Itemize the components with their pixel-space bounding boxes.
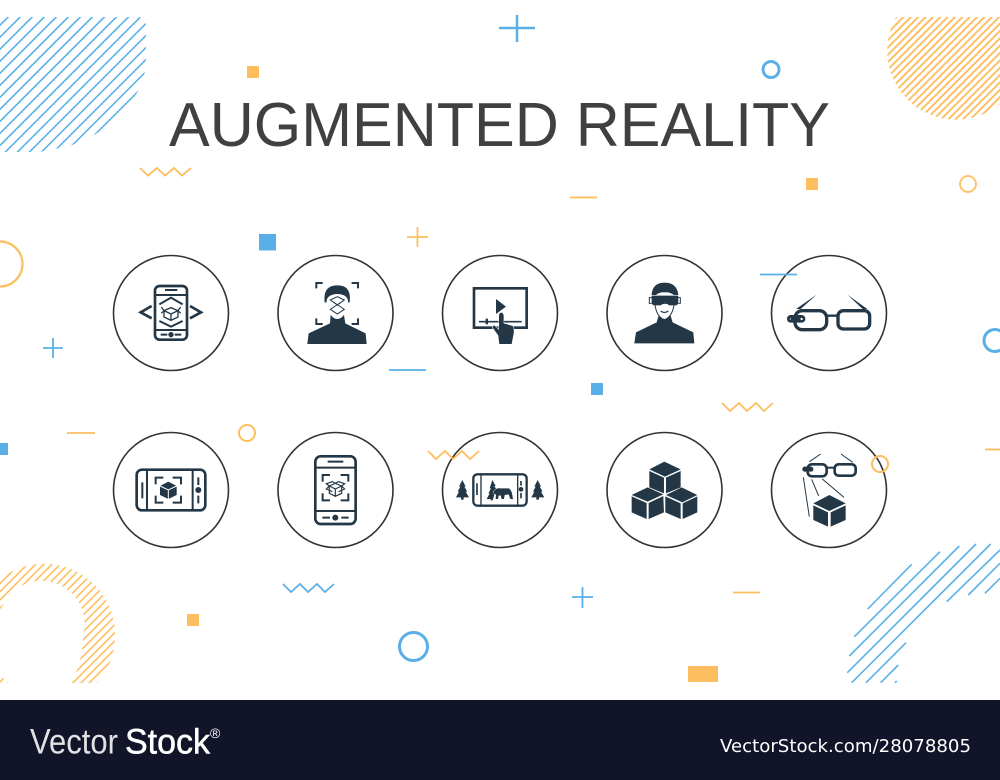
ring over projection circle [872,456,888,472]
hatched shape: top left [0,17,146,152]
bear scene glyph [456,474,544,506]
smart glasses glyph [787,295,870,330]
icon circle 10: glasses projecting cube [772,432,886,548]
VR person glyph [634,283,694,343]
hatched shape: top right [887,17,1000,120]
footer bar [0,700,1000,780]
footer logo: Stock [125,722,210,762]
registered mark: ® [210,725,221,741]
footer logo [30,722,210,762]
icon circle 2: face scan [278,256,393,370]
landscape phone glyph [137,470,205,510]
icon circle 9: three cubes [607,432,722,548]
hatched ring: bottom left [0,564,115,683]
line over glasses circle [760,274,797,276]
cubes glyph [632,462,697,519]
footer image id: VectorStock.com/28078805 [720,736,971,757]
touch screen glyph [474,288,527,344]
hatched ring: bottom right [847,544,1000,683]
icon circle 7: portrait phone with box [278,432,393,548]
zigzag over bear circle [428,451,479,459]
icon circle 5: smart glasses [772,256,886,370]
icon circle 3: video touch screen [442,256,558,370]
phone and arrows glyph [141,286,201,340]
icon circle 6: landscape phone with cube [114,432,228,548]
icon circle 1: phone with AR box [114,256,228,370]
title: AUGMENTED REALITY [169,91,830,160]
footer logo: Vector [30,722,118,762]
portrait phone glyph [315,456,356,524]
face scan glyph [307,283,367,344]
projection glyph [802,454,856,527]
icon circle 8: phone with bear and trees [442,432,558,548]
icon circle 4: person with VR headset [607,256,722,370]
